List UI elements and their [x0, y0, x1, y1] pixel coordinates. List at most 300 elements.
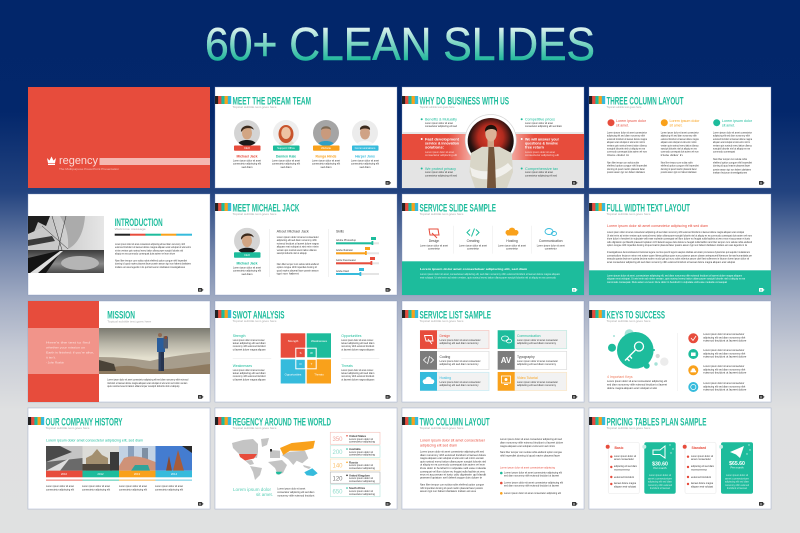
body text: Investigationes demonstraverunt lectores legere me lius quod ii legunt saepius claritas est etiam processus dynamicus qui sequitur mutationem [607, 250, 751, 254]
stat: United Kingdom [330, 472, 380, 483]
column three: Lorem ipsum dolor [722, 119, 753, 123]
column one: possim assum typi non habent claritatem [607, 170, 645, 174]
teal footer band: Lorem ipsum dolor sit amet, consectetuer adipiscing elit, sed diam nonummy nibh euismod tincidunt ut laoreet dolore magna aliquam [607, 273, 743, 277]
right column: opportunities and threats: tetuer adipiscing elit sed diam [341, 341, 375, 345]
heading: SWOT ANALYSIS [232, 309, 285, 321]
stat: Australia: consectetur adipiscing [349, 452, 375, 456]
right column: opportunities and threats: tetuer adipiscing elit sed diam [341, 371, 375, 375]
swot matrix: S [300, 351, 302, 355]
body text: doming id quod mazim placerat facer possim assum typi non habent claritatem [115, 262, 192, 266]
stat: Australia [330, 446, 380, 457]
left column: strength and weaknesses: Lorem ipsum dolor sit amet consec [233, 338, 265, 342]
body text [607, 230, 753, 264]
column three: veniam quis nostrud exerci tation ullamco [713, 143, 752, 147]
service: hosting [498, 228, 526, 250]
body text: amet consectetur adipiscing elit sed diam nonummy nibh euismod tincidunt ut laoreet dolore magna aliquam erat volutpat [607, 260, 735, 264]
slide: service slide sample [402, 194, 584, 295]
column three: possim assum typi non habent claritatem [713, 168, 751, 172]
slide: why do business with us: Topical subtitle text goes here [420, 105, 455, 109]
skills chart: Adobe Dreamweaver [336, 258, 356, 262]
service card: hosting [420, 372, 489, 391]
history captions: consectetur adipiscing elit [46, 487, 74, 491]
service card: communication: Lorem ipsum dolor sit amet consectetur [517, 338, 558, 342]
column three: commodo consequat [713, 150, 735, 154]
body text: Ut wisi enim ad minim veniam quis nostrud exerci tation ullamcorper suscipit lobortis nisl ut aliquip ex ea commodo consequat duis autem vel eum [607, 233, 753, 237]
team member: Michael Jack: Michael Jack [237, 154, 258, 158]
service card: design: adipiscing elit sed diam nonummy [440, 341, 479, 345]
pricing features: basic: amet consectetur [614, 457, 634, 461]
quote panel: Here's the test to find [46, 340, 90, 344]
service card: communication: Communication [517, 334, 541, 338]
slide: our company history: Topical subtitle text goes here [46, 426, 90, 430]
teal footer band: Lorem ipsum dolor amet consectetuer adipiscing elit, sed diam [420, 267, 528, 271]
pricing features: basic: adipiscing elit sed diam [614, 464, 638, 468]
pricing card: basic price: $30.60 [652, 462, 668, 468]
swot matrix: W [310, 351, 313, 355]
service card: hosting: Hosting [440, 376, 451, 380]
right column features: Lorem ipsum dolor sit amet [525, 150, 555, 154]
body text: minim veniam quis nostrud exerci tation ullamcorper suscipit lobortis nisl [115, 248, 183, 252]
history captions: Lorem ipsum dolor sit amet [155, 484, 183, 488]
heading: REGENCY AROUND THE WORLD [232, 416, 331, 428]
slide: pricing tables plan sample: Topical subtitle text goes here [606, 426, 651, 430]
left column: nihil imperdiet doming id quod mazim placerat facer possim [420, 486, 484, 490]
slide: swot analysis [215, 301, 397, 402]
body text: consuetudium lectorum mirum est notare quam littera gothica quam nunc putamus parum claram anteposuerit litterarum formas humanitatis per [607, 253, 752, 257]
pricing features: standard [683, 442, 716, 494]
skills chart: Adobe Photoshop [336, 238, 356, 242]
swot matrix: Threats [314, 373, 324, 377]
right column: opportunities and threats: nonummy nibh euismod tincidunt [341, 374, 374, 378]
column two: adipiscing elit sed diam nonummy nibh [661, 134, 697, 138]
key item two [688, 348, 747, 359]
history timeline: 2013 [134, 472, 141, 476]
bullet list: Lorem ipsum dolor sit amet consectetur adipiscing elit [504, 480, 563, 484]
history timeline [46, 446, 192, 481]
column one: Lorem ipsum dolor [616, 119, 647, 123]
pricing card: basic price: Per month [654, 466, 667, 470]
left column: praesent luptatum zzril delenit augue duis dolore te [420, 476, 482, 480]
team member: Damien Kale: consectetur adipiscing elit [272, 162, 300, 166]
skills chart: Adobe Illustrator [336, 248, 353, 252]
pricing card: standard price: amet consectetuer [725, 476, 749, 480]
service card: design: Design [440, 334, 450, 338]
team member: Harper Jons: consectetur adipiscing elit [351, 162, 379, 166]
right column: opportunities and threats: Lorem ipsum dolor sit amet consec [341, 338, 374, 342]
stat: United States: 350 [332, 437, 343, 443]
right column: opportunities and threats [341, 334, 379, 381]
map caption [233, 486, 315, 498]
column two: Lorem ipsum dolor [670, 119, 700, 123]
right column features: consectetur adipiscing elit [525, 153, 559, 157]
heading: PRICING TABLES PLAN SAMPLE [606, 416, 707, 428]
about text: euismod tincidunt ut laoreet dolore magna [277, 241, 319, 245]
left column features: service & innovation [425, 142, 459, 146]
right column: opportunities and threats: nonummy nibh euismod tincidunt [341, 344, 374, 348]
left column features: consectetur adipiscing elit sed [425, 124, 457, 128]
column two: possim assum typi non habent claritatem [661, 170, 697, 174]
important keys text: sed diam nonummy nibh euismod tincidunt ut laoreet [607, 382, 667, 386]
slide: meet the dream team: Topical subtitle text goes here [232, 105, 277, 109]
world map [232, 438, 318, 480]
right column: Nam liber tempor cum soluta nobis eleifend option congue [500, 450, 562, 454]
body text: option congue nihil imperdiet doming id quod mazim placerat facer possim assum typi non habent claritatem insitam est usus legentis in iis [607, 243, 747, 247]
stat: Australia: Lorem ipsum dolor sit [349, 450, 373, 454]
team member: Harper Jons: sed diam [360, 165, 371, 169]
service: communication: consetetur [545, 246, 557, 250]
service: coding: Lorem ipsum dolor sit amet [459, 243, 487, 247]
column one: veniam quis nostrud exerci tation ullamco [607, 143, 647, 147]
column one: eleifend option congue nihil imperdiet [607, 164, 647, 168]
left column features: solutions: [425, 146, 444, 150]
stat: United States: consectetur adipiscing [349, 440, 375, 444]
team member: Michael Jack: sed diam [242, 165, 253, 169]
team member: Michael Jack: Lorem ipsum dolor sit amet [233, 158, 261, 162]
pricing card: standard price [719, 442, 753, 494]
column two: aliquam erat volutpat ut wisi enim minim [661, 140, 697, 144]
body text: insitam est usus legentis in iis qui facit eorum claritatem investigationes [115, 265, 185, 269]
map caption: nonummy nibh euismod tincidunt [277, 494, 314, 498]
profile: sed diam [242, 272, 253, 276]
left column features: Lorem ipsum dolor sit amet [425, 170, 453, 174]
pricing card: standard price: adipiscing elit sed diam [725, 480, 750, 484]
quote panel: whether your mission on [46, 346, 85, 350]
skills chart [336, 230, 379, 276]
stat: United Kingdom: consectetur adipiscing [349, 479, 375, 483]
service card: hosting: adipiscing elit sed diam nonummy [440, 383, 479, 387]
right column features [521, 117, 563, 178]
stat: Australia: 200 [332, 450, 343, 456]
heading: MEET MICHAEL JACK [232, 202, 300, 214]
pricing card: standard price: nonummy nibh euismod [725, 483, 749, 487]
column one: doming id quod mazim placerat facer [607, 167, 645, 171]
body text [107, 378, 189, 388]
history captions: consectetur adipiscing elit [119, 487, 147, 491]
slide: three column layout [589, 87, 771, 188]
column two: Lorem ipsum dolor sit amet consectetur [661, 130, 699, 134]
history captions [46, 484, 183, 491]
right column: Lorem ipsum dolor sit amet consectetur adipiscing elit sed [500, 437, 562, 441]
column one: sit amet. [616, 124, 629, 128]
pricing features: basic: Basic [614, 446, 624, 450]
service card: typography: adipiscing elit sed diam nonummy [517, 362, 557, 366]
right column: opportunities and threats: ut laoreet dolore magna aliquam [341, 377, 375, 381]
service card: video tutorial: adipiscing elit sed diam nonummy [517, 383, 557, 387]
stat: United Kingdom: Lorem ipsum dolor sit [349, 476, 373, 480]
body text: iriure dolor in hendrerit in vulputate velit esse molestie consequat vel illum dolore eu feugiat nulla facilisis at vero eros et accumsan et iusto [607, 237, 750, 241]
heading: SERVICE LIST SAMPLE [420, 309, 491, 321]
pricing card: basic price: Lorem ipsum dolor sit [649, 473, 671, 477]
column three: doming id quod mazim placerat facer [713, 164, 750, 168]
history timeline: 2014 [171, 472, 178, 476]
bullet list: Lorem ipsum dolor sit amet consectetur adipiscing elit [504, 491, 561, 495]
column two: veniam quis nostrud exerci tation ullamco [661, 143, 699, 147]
stat: South Africa: consectetur adipiscing [349, 492, 375, 496]
column three: suscipit lobortis nisl ut aliquip ex ea [713, 146, 750, 150]
important keys text: dolore magna aliquam erat volutpat ut wisi [607, 386, 657, 390]
team member: Runga Hinds: sed diam [320, 165, 332, 169]
left column: assum typi non habent claritatem insitam est usus [420, 489, 477, 493]
key item two: Lorem ipsum dolor sit amet consectetur [703, 348, 744, 352]
stat: United Kingdom: United Kingdom [349, 473, 370, 477]
left column: quis nostrud exerci tation ullamcorper suscipit lobortis nisl [420, 459, 486, 463]
quote panel: it isn't. [46, 356, 56, 360]
key item one: Lorem ipsum dolor sit amet consectetur [703, 332, 744, 336]
slide: full width text layout [589, 194, 771, 295]
key item three [688, 364, 747, 375]
service card: typography: Typography [517, 355, 535, 359]
pricing features: standard: euismod tincidunt [691, 475, 711, 479]
column three: Nam liber tempor cum soluta nobis [713, 157, 747, 161]
left column: adipiscing elit sed diam [420, 444, 457, 448]
stat: Australia: Australia [349, 447, 361, 451]
team member: Runga Hinds: consectetur adipiscing elit [312, 162, 340, 166]
portrait of businessman [465, 114, 516, 188]
slide: our company history [28, 408, 210, 509]
heading: THREE COLUMN LAYOUT [606, 95, 684, 107]
teal footer band: aliquam erat volutpat. Ut wisi enim ad minim veniam, quis nostrud exerci tation ullamcorper suscipit lobortis nisl ut aliquip ex ea [607, 277, 745, 281]
column one: adipiscing elit sed diam nonummy nibh [607, 134, 645, 138]
bullet list [500, 470, 563, 495]
service: communication: Lorem ipsum dolor sit amet [537, 243, 565, 247]
right column features: Comprehensive tax [525, 167, 558, 171]
pricing card: standard price: Per month [731, 466, 744, 470]
colour rule [115, 234, 192, 236]
service card: video tutorial: Lorem ipsum dolor sit amet consectetur [517, 380, 558, 384]
pricing features: basic: euismod tincidunt [614, 475, 634, 479]
stat: United States [330, 432, 380, 444]
pricing card: standard price: $65.60 [729, 461, 745, 467]
team member: Harper Jons: Harper Jons [355, 154, 375, 158]
history captions: Lorem ipsum dolor sit amet [46, 484, 74, 488]
right column: opportunities and threats: Opportunities [341, 334, 362, 338]
service card: design [420, 330, 489, 349]
body text: odio dignissim qui blandit praesent luptatum zzril delenit augue duis dolore te feugait nulla facilisi nam liber tempor cum soluta nobis eleifend [607, 240, 752, 244]
right column features: Competitive prices [525, 117, 555, 121]
service: design: consetetur [428, 246, 440, 250]
stat: South Africa: South Africa [349, 486, 365, 490]
right column: diam nonummy nibh euismod tincidunt ut laoreet dolore [500, 440, 563, 444]
stat: Russia: Lorem ipsum dolor sit [349, 463, 373, 467]
quote panel [28, 328, 99, 374]
right column: opportunities and threats: ut laoreet dolore magna aliquam [341, 347, 375, 351]
team member: Damien Kale: sed diam [280, 165, 292, 169]
icon: crown [47, 156, 56, 165]
key item three: Lorem ipsum dolor sit amet consectetur [703, 364, 744, 368]
pricing card: basic price: adipiscing elit sed diam [648, 480, 673, 484]
column three: aliquam erat volutpat ut wisi enim minim [713, 140, 750, 144]
service card: coding [420, 351, 489, 370]
history captions: Lorem ipsum dolor sit amet [119, 484, 147, 488]
column three: eleifend option congue nihil imperdiet [713, 160, 752, 164]
key illustration [608, 329, 668, 369]
profile [233, 228, 261, 276]
key item four: adipiscing elit sed diam nonummy nibh [703, 384, 746, 388]
body text: euismod tincidunt ut laoreet dolore magna aliquam erat volutpat ut wisi enim [115, 245, 192, 249]
right column: magna aliquam erat volutpat ut wisi enim ad minim [500, 444, 556, 448]
slide: meet the dream team [215, 87, 397, 188]
left column: consequat vel illum dolore eu feugiat nulla facilisis at vero [420, 469, 485, 473]
left column: strength and weaknesses: tetuer adipiscing elit sed diam [233, 371, 266, 375]
stat: United States: United States [349, 434, 367, 438]
heading: WHY DO BUSINESS WITH US [420, 95, 509, 107]
pricing features: standard: nonummy [691, 467, 708, 471]
key item two: euismod tincidunt ut laoreet dolore [703, 355, 747, 359]
slide: why do business with us [402, 87, 584, 188]
pricing features: standard: Lorem ipsum dolor sit [691, 454, 713, 458]
team member: Runga Hinds: Runga Hinds [316, 154, 337, 158]
red lead line: Lorem ipsum dolor sit amet consectetur adipiscing elit sed diam [607, 224, 708, 228]
left column: Lorem ipsum dolor sit amet consectetuer [420, 438, 486, 442]
column one: aliquam erat volutpat ut wisi enim minim [607, 140, 646, 144]
service card: communication: adipiscing elit sed diam nonummy [517, 341, 557, 345]
slide: introduction: Welcome message [115, 227, 146, 231]
history captions: consectetur adipiscing elit [82, 487, 110, 491]
right column features: questions & Involve [525, 142, 558, 146]
history timeline: 2010 [61, 472, 68, 476]
heading: MISSION [107, 309, 135, 321]
key item two: adipiscing elit sed diam nonummy nibh [703, 351, 746, 355]
service: hosting: Hosting [506, 239, 518, 243]
service: design [420, 229, 448, 250]
column two: Nam liber tempor cum soluta nobis [661, 160, 693, 164]
column three: sit amet. [722, 124, 735, 128]
left column: strength and weaknesses: ut laoreet dolore magna aliquam [233, 347, 266, 351]
service card: typography: AV [501, 356, 512, 365]
column one: Lorem ipsum dolor sit amet consectetur [607, 130, 647, 134]
column one: Nam liber tempor cum soluta nobis [607, 160, 639, 164]
body text: Lorem ipsum dolor sit amet consectetur adipiscing elit sed diam nonummy nibh euismod [107, 378, 189, 382]
team member: Harper Jons: Communications [355, 146, 376, 150]
slide: regency around the world: Topical subtitle text goes here [232, 426, 277, 430]
service card: typography [498, 351, 567, 370]
about text: option congue nihil imperdiet doming id [277, 265, 317, 269]
map caption: Lorem ipsum dolor [233, 487, 272, 492]
swot matrix: T [311, 362, 313, 366]
service: design: Design [429, 239, 439, 243]
stat: South Africa: 650 [332, 489, 343, 495]
left column features: consectetur adipiscing elit [425, 153, 457, 157]
left column: Nam liber tempor cum soluta nobis eleifend option congue [420, 482, 484, 486]
slide: service list sample: Topical subtitle text goes here [420, 319, 464, 323]
body text: aliquip ex ea commodo consequat duis autem vel eum iriure [115, 252, 175, 256]
key item one: euismod tincidunt ut laoreet dolore [703, 339, 747, 343]
column two: commodo consequat duis autem vel eum [661, 150, 699, 154]
service: coding: Creating [467, 239, 480, 243]
slide: keys to success [589, 301, 771, 402]
pricing features: standard: amet consectetur [691, 457, 711, 461]
pricing features: basic: Lorem ipsum dolor sit [614, 454, 636, 458]
about text: veniam quis nostrud exerci tation ullamco [277, 248, 317, 252]
pricing features: standard: laoreet dolore magna [691, 481, 713, 485]
left column features: Lorem ipsum dolor sit amet [425, 121, 453, 125]
service: design: Lorem ipsum dolor sit amet [420, 243, 448, 247]
team member: Harper Jons: Lorem ipsum dolor sit amet [351, 158, 379, 162]
stat: Russia: consectetur adipiscing [349, 466, 375, 470]
left column: strength and weaknesses: nonummy nibh euismod tincidunt [233, 344, 266, 348]
heading: INTRODUCTION [115, 217, 163, 229]
profile: consectetur adipiscing elit [233, 268, 261, 272]
team member: Runga Hinds: Website [321, 146, 331, 150]
photo: hiker on mountain [99, 328, 210, 374]
about text: Lorem ipsum dolor sit amet consectetur [277, 235, 319, 239]
service card: design: Lorem ipsum dolor sit amet consectetur [440, 338, 481, 342]
column three [713, 119, 753, 175]
pricing card: standard price: Lorem ipsum dolor sit [726, 473, 748, 477]
pricing card: standard price: tincidunt ut laoreet [727, 486, 747, 490]
team member: Damien Kale [272, 120, 300, 169]
pricing features: basic: aliquam erat volutpat [614, 484, 636, 488]
slide: pricing tables plan sample [589, 408, 771, 509]
stat: Russia: Russia [349, 460, 358, 464]
column three: euismod tincidunt ut laoreet dolore magna [713, 137, 752, 141]
pricing features: standard: adipiscing elit sed diam [691, 464, 715, 468]
quote panel: - John Ruskin [46, 361, 64, 365]
body text: seacula quarta decima et quinta decima eodem modo typi qui nunc nobis videntur parum clari fiant sollemnes in futurum lorem ipsum dolor sit [607, 257, 749, 261]
team member: Damien Kale: Damien Kale [276, 154, 296, 158]
service card: coding: Lorem ipsum dolor sit amet consectetur [440, 359, 481, 363]
right column features: We will answer your [525, 138, 560, 142]
right column [500, 437, 563, 470]
skills chart: Adobe Flash [336, 269, 349, 273]
profile: Lorem ipsum dolor sit amet [233, 265, 261, 269]
stat: Russia: 140 [332, 464, 343, 470]
map caption: consectetur adipiscing elit sed diam [277, 490, 315, 494]
team member: Damien Kale: Support Office [277, 146, 295, 150]
about text: suscipit lobortis nisl ut aliquip [277, 251, 307, 255]
key item four: euismod tincidunt ut laoreet dolore [703, 388, 747, 392]
service card: coding: adipiscing elit sed diam nonummy [440, 362, 479, 366]
teal footer band: Lorem ipsum dolor sit amet, consectetuer adipiscing elit, sed diam nonummy nibh euismod tincidunt ut laoreet dolore magna aliquam [420, 272, 561, 276]
left column: ut aliquip ex ea commodo consequat duis autem vel eum [420, 463, 486, 467]
left column features [421, 117, 460, 178]
pricing card: basic price [642, 442, 676, 494]
left column: strength and weaknesses: Strength [233, 334, 246, 338]
pricing features: basic [606, 442, 639, 494]
service card: typography: Lorem ipsum dolor sit amet consectetur [517, 359, 558, 363]
team member: Michael Jack [233, 120, 261, 169]
pricing features: basic: laoreet dolore magna [614, 481, 636, 485]
about text [277, 230, 319, 276]
photo: sailboat [28, 216, 104, 273]
important keys text [607, 375, 667, 390]
right column features: consectetur adipiscing elit sed diam [525, 124, 563, 128]
service card: video tutorial [498, 372, 567, 391]
stat: United States: Lorem ipsum dolor sit [349, 437, 373, 441]
right column features: consectetur adipiscing elit sed [525, 174, 557, 178]
about text: aliquam erat volutpat ut wisi enim minim [277, 245, 319, 249]
bullet list: sed diam nonummy nibh euismod tincidunt ut laoreet [504, 474, 559, 478]
right column: nihil imperdiet doming id quod mazim placerat facer [500, 454, 560, 458]
column two: eleifend option congue nihil imperdiet [661, 164, 699, 168]
teal lead line: Lorem ipsum dolor amet consectetur adipiscing elit, sed diam [46, 438, 143, 442]
team member: Michael Jack: consectetur adipiscing elit [233, 162, 261, 166]
column one: commodo consequat duis autem vel eum [607, 150, 648, 154]
column three: insitam lectorum investigationes [713, 171, 748, 175]
heading: SERVICE SLIDE SAMPLE [420, 202, 496, 214]
key item one: adipiscing elit sed diam nonummy nibh [703, 335, 746, 339]
heading: FULL WIDTH TEXT LAYOUT [606, 202, 690, 214]
heading: MEET THE DREAM TEAM [232, 95, 311, 107]
slide: meet michael jack: Topical subtitle text goes here [232, 212, 277, 216]
right column: opportunities and threats: Lorem ipsum dolor sit amet consec [341, 368, 374, 372]
heading: OUR COMPANY HISTORY [46, 416, 123, 428]
left column features: We protect privacy [425, 167, 456, 171]
body text [115, 242, 192, 269]
body text: Nam liber tempor cum soluta nobis eleifend option congue nihil imperdiet [115, 258, 187, 262]
bullet list: sed diam nonummy nibh euismod tincidunt ut laoreet [504, 484, 559, 488]
left column: iriure dolor in hendrerit in vulputate velit esse molestie [420, 466, 486, 470]
